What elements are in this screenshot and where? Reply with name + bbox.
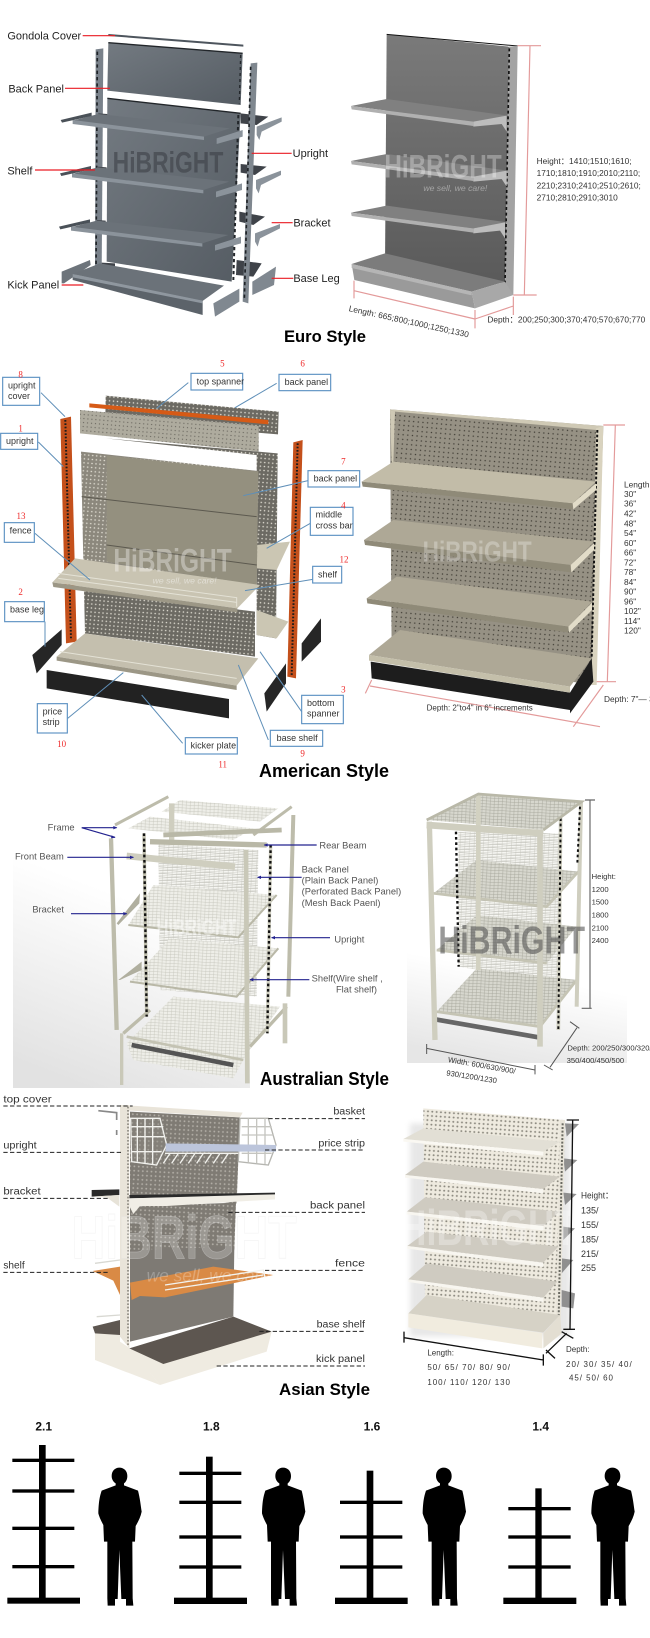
depth label: Depth: 200/250/300/320/: [567, 1043, 650, 1052]
label: base leg: base leg: [10, 605, 44, 615]
left orange upright: [60, 417, 77, 643]
label: middle cross bar: cross bar: [316, 520, 353, 530]
rear hook: [98, 1111, 117, 1135]
arrow labels: (Plain Back Panel): [302, 875, 378, 885]
base shelf: [352, 253, 513, 308]
label: top spanner: [191, 373, 244, 390]
label: shelf: [313, 566, 342, 583]
label: middle cross bar: [310, 507, 353, 535]
panel: american style dimension diagram: [362, 409, 650, 727]
labels: fence: [335, 1259, 366, 1270]
label: kicker plate: [185, 738, 237, 754]
base shelf and kick plate: [369, 630, 593, 713]
rear main panel: [106, 438, 278, 638]
labels: price strip: [318, 1139, 365, 1150]
lower panel: [84, 590, 255, 657]
length depth label: Depth: 2"to4" in 6" increments: [427, 704, 533, 713]
arrows: [67, 826, 330, 981]
dashed leader lines: [3, 1106, 365, 1366]
part numbers: 8: [18, 369, 23, 379]
length list: 90": [624, 587, 636, 597]
gondola silhouette 1.6: [335, 1471, 408, 1604]
base shelf and kick panel: [62, 260, 224, 315]
height list: 185/: [581, 1234, 599, 1244]
arrow labels: Front Beam: [15, 851, 64, 861]
depth label: [567, 1043, 650, 1065]
callout labels: Bracket: [293, 218, 331, 230]
length list: 66": [624, 548, 636, 558]
part numbers: 10: [57, 739, 67, 749]
wire shelf 1: [117, 885, 277, 937]
label: base leg: [5, 602, 44, 622]
arrow labels: Upright: [334, 934, 365, 944]
length list: 72": [624, 557, 636, 567]
shelf 3: [351, 206, 508, 238]
length list: 114": [624, 616, 640, 626]
label: top spanner: top spanner: [197, 376, 244, 386]
background haze: australian right: [407, 920, 627, 1063]
callout labels: Gondola Cover: [7, 30, 82, 42]
height label: 1710;1810;1910;2010;2110;: [537, 168, 640, 178]
base legs: [32, 618, 321, 712]
top wire shelves: [128, 800, 278, 840]
length list: [624, 479, 650, 636]
watermark: [113, 543, 232, 586]
far frame: [115, 797, 293, 997]
length list: 96": [624, 596, 636, 606]
panel: height comparison right: [335, 1420, 635, 1606]
part numbers: 11: [218, 759, 227, 769]
callout labels: Kick Panel: [7, 279, 59, 291]
back panel part: [107, 43, 243, 105]
title: Australian Style: Australian Style: [260, 1069, 389, 1089]
base shelf: [408, 1295, 562, 1348]
height list: 1500: [592, 898, 609, 907]
label: price strip: strip: [43, 717, 60, 727]
label: back panel 6: back panel: [285, 377, 328, 387]
left upright part: [95, 48, 103, 272]
depth label: 350/400/450/500: [567, 1056, 624, 1065]
height list: 1200: [592, 885, 609, 894]
base shelf: [57, 633, 258, 690]
part numbers: 1: [18, 424, 23, 434]
height list: 1800: [592, 910, 609, 919]
length list: 54": [624, 528, 636, 538]
shelf 1: [61, 113, 282, 144]
arrow labels: Shelf(Wire shelf ,: [312, 974, 383, 984]
panel: euro style exploded diagram: [7, 30, 340, 317]
length list: 78": [624, 567, 636, 577]
bracket shelf: [92, 1189, 275, 1214]
panel: height comparison left: [7, 1420, 305, 1606]
panel: asian style dimension diagram: [400, 1108, 613, 1348]
top mesh: [427, 794, 582, 830]
callout labels: Base Leg: [293, 273, 340, 285]
middle perforated panel: [130, 1203, 236, 1253]
part numbers: [17, 359, 348, 769]
height label: [537, 156, 641, 202]
part numbers: 9: [300, 748, 305, 758]
watermark: HiBRiGHT: [384, 149, 502, 185]
width label: Width: 600/630/900/: [447, 1055, 517, 1076]
lower back panel part: [107, 98, 241, 282]
front main panel: [81, 452, 258, 585]
label: back panel 7: back panel: [314, 474, 357, 484]
dimension strokes: [427, 1022, 579, 1074]
length label: Length:: [427, 1349, 454, 1358]
upper perforated panel: [130, 1112, 240, 1203]
label: upright cover: [3, 377, 40, 405]
person silhouette: [98, 1468, 142, 1606]
depth label: 20/ 30/ 35/ 40/: [566, 1360, 632, 1369]
price strip: [166, 1143, 276, 1152]
callout labels: [7, 30, 340, 291]
arrow labels: Back Panel: [302, 864, 349, 874]
shelf 2: [351, 154, 508, 187]
rear top perforated panel: [105, 396, 279, 434]
part numbers: 2: [18, 587, 23, 597]
label: fence: fence: [10, 525, 32, 535]
panel: asian style exploded diagram: [3, 1095, 366, 1385]
depth label: 45/ 50/ 60: [569, 1374, 614, 1383]
perforated back panel: [390, 409, 603, 685]
shelf 3: [367, 577, 592, 633]
person silhouette: [262, 1468, 305, 1606]
label: bottom spanner: [302, 695, 343, 724]
watermark: HiBRiGHT: [113, 543, 232, 579]
wire shelves: [433, 860, 578, 1037]
height list: [581, 1191, 613, 1273]
watermark: we sell, we care!: [153, 576, 217, 586]
part numbers: 4: [341, 500, 346, 510]
gondola cover part: [108, 34, 243, 47]
labels: upright: [3, 1141, 37, 1152]
part numbers: 5: [220, 359, 225, 369]
part numbers: 7: [341, 456, 346, 466]
length list: 36": [624, 499, 636, 509]
height label: Height：1410;1510;1610;: [537, 156, 632, 166]
label: base shelf: [270, 730, 323, 746]
panel: american style exploded diagram: [1, 359, 360, 769]
length list: 102": [624, 606, 641, 616]
base shelf: [123, 997, 287, 1078]
height dimension: [582, 800, 595, 1008]
shelf 2: [60, 166, 281, 197]
arrow labels: Frame: [48, 823, 75, 833]
label: bottom spanner: bottom: [307, 698, 334, 708]
top spanner: [89, 403, 268, 424]
shelves: [403, 1128, 560, 1302]
background haze: australian left: [13, 800, 250, 1088]
length label: 100/ 110/ 120/ 130: [427, 1378, 511, 1387]
gondola silhouette 1.8: [174, 1457, 247, 1604]
height list: 2400: [592, 936, 609, 945]
title: Asian Style: Asian Style: [279, 1380, 370, 1399]
shelf 2: [364, 520, 594, 572]
base: [93, 1315, 272, 1385]
watermark: HiBRiGHT: [113, 147, 223, 180]
height label: 2710;2810;2910;3010: [537, 192, 618, 202]
height list: 155/: [581, 1220, 599, 1230]
arrow labels: (Mesh Back Paenl): [302, 898, 380, 908]
perforated back panel: [423, 1108, 565, 1320]
callout labels: Back Panel: [8, 83, 64, 95]
panel: australian style exploded diagram: [15, 797, 401, 1085]
label: middle cross bar: middle: [316, 510, 342, 520]
height label: 2210;2310;2410;2510;2610;: [537, 180, 641, 190]
labels: base shelf: [317, 1319, 365, 1330]
right orange upright: [287, 440, 303, 678]
dimension lines: [354, 46, 541, 328]
watermark: HiBRiGHT: [423, 537, 532, 569]
panel: asian dimension notes: [404, 1332, 632, 1387]
arrow labels: (Perforated Back Panel): [302, 887, 401, 897]
arrow labels: Rear Beam: [319, 841, 367, 851]
length list: 60": [624, 538, 636, 548]
wire shelf 2: [118, 938, 278, 997]
label: fence: [4, 523, 34, 542]
shelf 1: [351, 99, 508, 132]
length list: 120": [624, 626, 641, 636]
height label 2.1: 2.1: [35, 1420, 52, 1434]
labels: top cover: [3, 1095, 52, 1106]
length and depth lines: [404, 1332, 573, 1366]
depth label: Depth:: [566, 1345, 590, 1354]
part numbers: 3: [341, 685, 346, 695]
label: back panel 6: [279, 374, 331, 391]
watermark: we sell, we care!: [423, 183, 488, 193]
basket: [131, 1118, 276, 1165]
height list: 215/: [581, 1249, 599, 1259]
depth label: Depth：200;250;300;370;470;570;670;770: [487, 315, 646, 325]
height list: 2100: [592, 923, 609, 932]
upright: [556, 1120, 565, 1323]
labels: kick panel: [316, 1354, 365, 1365]
part numbers: 6: [300, 359, 305, 369]
shelf 1: [362, 462, 596, 509]
height dimension: [563, 1120, 579, 1329]
height list: 255: [581, 1263, 596, 1273]
height label 1.6: 1.6: [364, 1420, 381, 1434]
rear shelf ends: [562, 1123, 579, 1308]
panel: australian dimension notes: [427, 1022, 650, 1085]
labels: bracket: [3, 1186, 41, 1197]
label: price strip: [37, 704, 67, 733]
callout labels: Upright: [293, 148, 328, 160]
upright: [505, 46, 518, 295]
label: upright: [1, 433, 38, 449]
length list: 30": [624, 489, 636, 499]
part numbers: 12: [340, 554, 348, 564]
watermark: HiBRiGHT: [72, 1203, 297, 1272]
labels: back panel: [310, 1200, 365, 1211]
title: Euro Style: Euro Style: [284, 327, 366, 346]
height list: [592, 872, 616, 945]
labels: basket: [333, 1106, 365, 1117]
shelf 3: [59, 219, 280, 251]
length list: 48": [624, 518, 636, 528]
front top panel: [80, 410, 259, 452]
labels: [3, 1095, 366, 1365]
label: shelf: shelf: [318, 569, 337, 579]
watermark: [384, 149, 502, 193]
title: American Style: American Style: [259, 761, 389, 781]
person silhouette: [591, 1468, 635, 1606]
label: upright: upright: [6, 436, 34, 446]
height label 1.4: 1.4: [532, 1420, 549, 1434]
frame and upright: [390, 409, 603, 685]
soft shadow: [410, 1123, 570, 1337]
back panel: [385, 34, 518, 283]
label: price strip: price: [43, 706, 62, 716]
panel: australian style dimension diagram: [427, 794, 616, 1047]
label: bottom spanner: spanner: [307, 709, 339, 719]
arrow labels: Flat shelf): [336, 985, 377, 995]
length list: 42": [624, 509, 636, 519]
top cover: [120, 1105, 243, 1117]
label: base shelf: base shelf: [277, 733, 318, 743]
right back shelf ends: [236, 113, 268, 277]
lower solid panel: [130, 1247, 234, 1342]
watermark: HiBRiGHT: [157, 915, 237, 940]
upright: [120, 1105, 129, 1348]
back mesh: [458, 832, 560, 983]
height list: Height:: [592, 872, 616, 881]
watermark: HiBRiGHT: [400, 1200, 577, 1256]
orange shelf: [93, 1260, 273, 1300]
label: back panel 7: [308, 471, 360, 487]
watermark: [72, 1203, 297, 1286]
watermark: HiBRiGHT: [438, 918, 585, 962]
person silhouette: [423, 1468, 466, 1606]
label: upright cover: cover: [8, 391, 30, 401]
labels: shelf: [3, 1261, 25, 1272]
fence shelf: [52, 558, 260, 612]
label: upright cover: upright: [8, 380, 36, 390]
arrow labels: [15, 823, 401, 995]
uprights: [111, 833, 285, 1085]
length list: 84": [624, 577, 636, 587]
width label: 930/1200/1230: [446, 1068, 498, 1085]
length label: 50/ 65/ 70/ 80/ 90/: [427, 1363, 511, 1372]
leader lines: [35, 383, 313, 743]
panel: euro style dimension diagram: [348, 34, 646, 340]
mesh back panel: [158, 843, 258, 997]
height label 1.8: 1.8: [203, 1420, 220, 1434]
width label: [446, 1055, 517, 1085]
depth label: [566, 1345, 632, 1383]
part numbers: 13: [17, 511, 26, 521]
height list: Height：: [581, 1191, 613, 1201]
kicker plate: [47, 670, 229, 718]
gondola silhouette 1.4: [503, 1488, 576, 1604]
right upright part: [243, 63, 257, 303]
side shelves behind: [257, 542, 290, 638]
arrow labels: Bracket: [32, 904, 64, 914]
frame and uprights: [427, 794, 582, 1047]
base legs: [213, 267, 276, 317]
watermark: we sell, we care!: [147, 1266, 275, 1286]
beams: [127, 830, 282, 867]
length label: Length: 665;800;1000;1250;1330: [348, 303, 470, 340]
gondola silhouette 2.1: [7, 1445, 80, 1604]
height list: 135/: [581, 1205, 599, 1215]
length label: [427, 1349, 511, 1387]
callout labels: Shelf: [7, 166, 33, 178]
dimension lines: [365, 425, 625, 727]
label: kicker plate: kicker plate: [191, 740, 236, 750]
